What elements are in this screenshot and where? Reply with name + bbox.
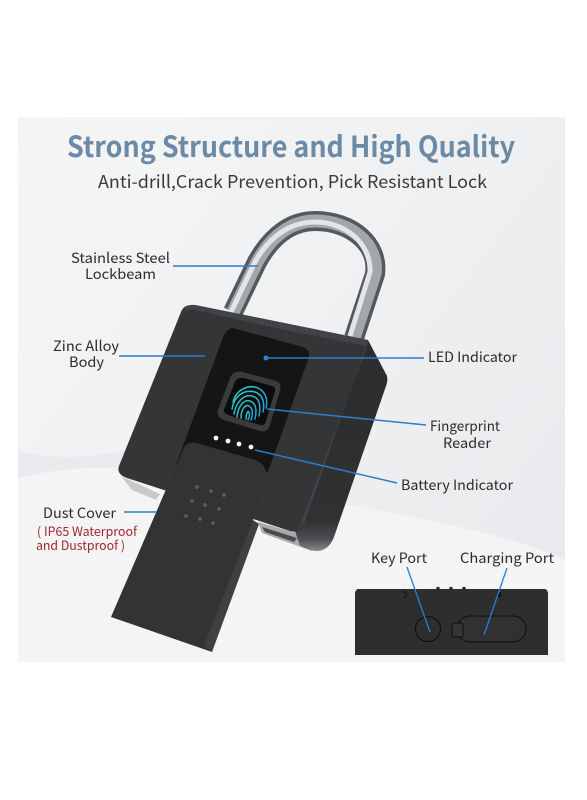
label: battery indicator bbox=[255, 450, 514, 495]
dust cover bbox=[111, 443, 266, 652]
icon: battery indicator LEDs bbox=[214, 436, 253, 449]
top details bbox=[402, 587, 501, 597]
icon: fingerprint bbox=[232, 387, 267, 420]
label: stainless steel lockbeam: Lockbeam bbox=[85, 264, 156, 284]
icon: charging port bbox=[452, 616, 526, 642]
icon: cover dots bbox=[183, 484, 227, 526]
lock bottom view bbox=[355, 589, 548, 655]
label: battery indicator: Battery Indicator bbox=[401, 475, 514, 495]
label: dust cover: and Dustproof ) bbox=[36, 535, 125, 554]
icon: key port bbox=[416, 616, 440, 642]
padlock illustration bbox=[111, 221, 387, 652]
label: dust cover bbox=[36, 503, 157, 554]
label: dust cover: ( IP65 Waterproof bbox=[37, 521, 138, 540]
background panel bbox=[18, 117, 565, 662]
label: LED indicator: LED Indicator bbox=[428, 347, 518, 367]
fingerprint window bbox=[176, 328, 309, 472]
icon: LED indicator bbox=[264, 356, 268, 360]
label: fingerprint reader: Fingerprint bbox=[430, 416, 501, 436]
port close-up bbox=[355, 587, 548, 655]
label: dust cover: Dust Cover bbox=[43, 503, 117, 523]
fingerprint reader bbox=[218, 372, 280, 431]
icon: steel shackle bbox=[231, 221, 375, 338]
lock body bbox=[118, 305, 387, 551]
label: stainless steel lockbeam: Stainless Steel bbox=[71, 248, 170, 268]
label: zinc alloy body: Zinc Alloy bbox=[53, 336, 120, 356]
subtitle: Anti-drill,Crack Prevention, Pick Resistant Lock bbox=[98, 169, 487, 194]
label: charging port bbox=[460, 548, 555, 635]
label: fingerprint reader: Reader bbox=[443, 433, 492, 453]
label: fingerprint reader bbox=[267, 409, 501, 453]
label: key port bbox=[371, 548, 430, 632]
label: stainless steel lockbeam bbox=[71, 248, 258, 284]
title: Strong Structure and High Quality bbox=[67, 124, 515, 166]
label: zinc alloy body bbox=[53, 336, 205, 372]
label: charging port: Charging Port bbox=[460, 548, 555, 568]
label: zinc alloy body: Body bbox=[69, 352, 105, 372]
label: key port: Key Port bbox=[371, 548, 428, 568]
